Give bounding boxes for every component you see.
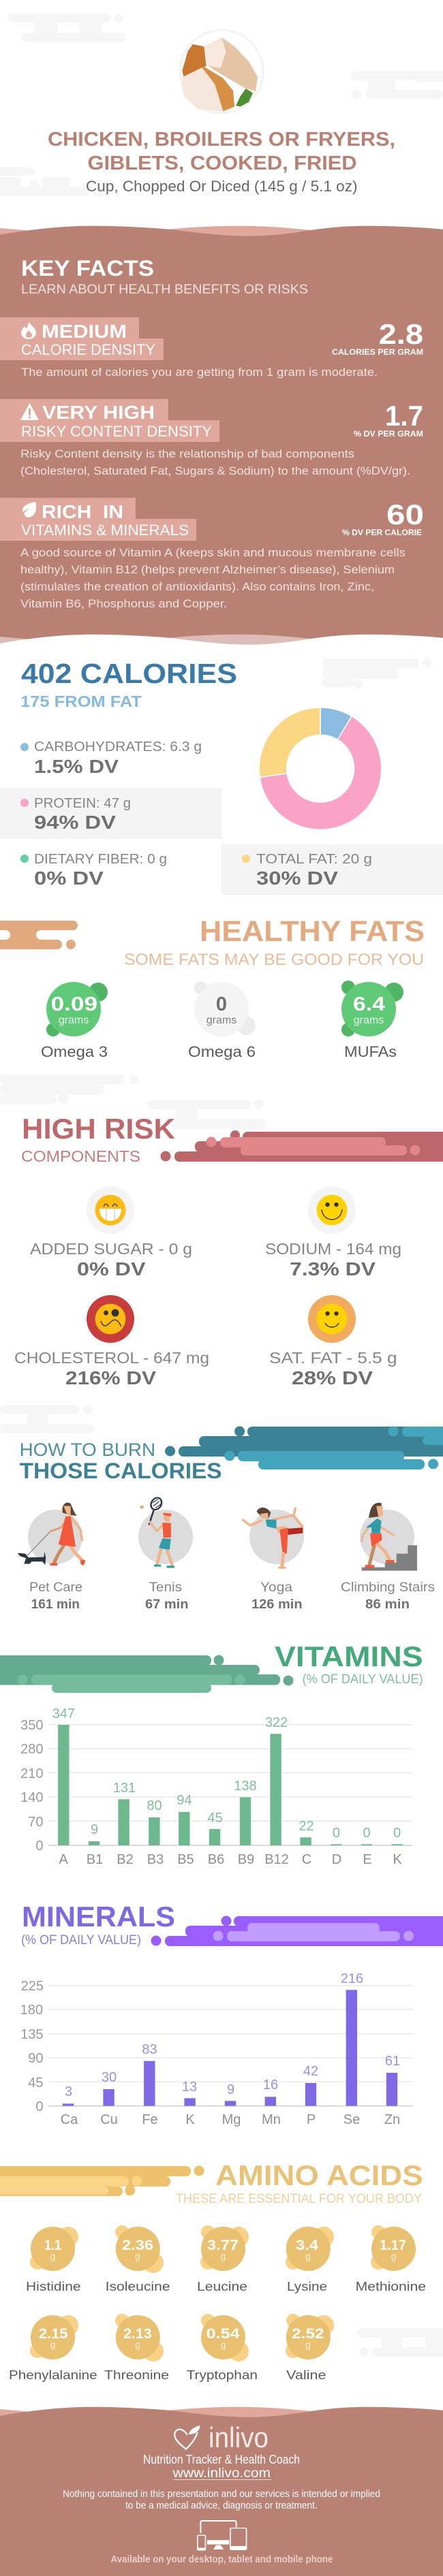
subheading: percent of daily value: (% OF DAILY VALUE)	[21, 1933, 141, 1947]
fact: rich in vitamins and minerals	[0, 498, 424, 610]
activity labels	[29, 1580, 435, 1612]
activity: pet care	[18, 1503, 86, 1565]
amino: tryptophan: Tryptophan	[187, 2368, 258, 2382]
bar chart: vitamins: B2	[117, 1852, 134, 1867]
bar chart: minerals	[20, 1971, 412, 2127]
stat: 1.7: 1.7	[385, 400, 423, 432]
amino: isoleucine: Isoleucine	[106, 2280, 170, 2293]
amino: leucine	[197, 2225, 249, 2293]
amino: threonine	[104, 2314, 169, 2382]
legend: dietary fiber: DIETARY FIBER: 0 g	[34, 852, 167, 867]
bar chart: vitamins: 9	[91, 1822, 98, 1837]
heading: healthy fats: HEALTHY FATS	[200, 915, 425, 948]
amino: isoleucine	[106, 2225, 170, 2293]
panel: how to burn those calories	[18, 1426, 443, 1612]
legend: total fat	[222, 844, 443, 895]
heading: high risk: HIGH RISK	[22, 1113, 175, 1145]
stat: omega 6: 0	[216, 993, 227, 1015]
activity labels: Yoga	[260, 1580, 292, 1595]
icon: leaf	[22, 502, 36, 518]
subtitle: serving size: Cup, Chopped Or Diced (145 g / 5.1 oz)	[86, 178, 357, 195]
bar chart: minerals: 216	[341, 1971, 363, 1986]
legend: protein: 94% DV	[34, 812, 116, 833]
decorative banner: burn	[165, 1426, 443, 1469]
bar chart: vitamins: B3	[147, 1852, 164, 1867]
bar chart: vitamins: 347	[52, 1706, 75, 1721]
bar chart: vitamins: B6	[208, 1852, 224, 1867]
bar chart: minerals: Se	[343, 2112, 360, 2127]
bar chart: minerals: 90	[28, 2051, 44, 2066]
icon: flame	[21, 322, 36, 339]
bar chart: vitamins: 0	[35, 1839, 44, 1854]
panel: calories	[0, 658, 443, 895]
amino: threonine: g	[135, 2339, 140, 2350]
legend: total fat: 30% DV	[256, 868, 338, 889]
bar chart: minerals: 13	[182, 2080, 197, 2095]
bar chart: vitamins: B5	[177, 1852, 194, 1867]
description: (Cholesterol, Saturated Fat, Sugars & Sodium) to the amount (%DV/gr).	[20, 464, 410, 477]
stat unit: % DV PER GRAM	[354, 429, 423, 439]
label: vitamins and minerals: VITAMINS & MINERALS	[21, 522, 189, 539]
bar chart: minerals: 45	[28, 2076, 44, 2090]
item: sodium: 7.3% DV	[290, 1258, 376, 1279]
bar chart: vitamins: C	[302, 1852, 311, 1867]
subheading: key facts: LEARN ABOUT HEALTH BENEFITS OR RISKS	[21, 283, 308, 297]
subheading: healthy fats: SOME FATS MAY BE GOOD FOR YOU	[124, 951, 424, 969]
amino: lysine: Lysine	[287, 2280, 327, 2293]
description: Risky Content density is the relationship of bad components	[20, 447, 354, 460]
logo: inlivo	[174, 2421, 269, 2453]
legend: carbohydrates: CARBOHYDRATES: 6.3 g	[34, 740, 202, 754]
disclaimer: Nothing contained in this presentation and our services is intended or implied	[63, 2489, 380, 2500]
bar chart: minerals: 225	[21, 1979, 44, 1994]
legend: protein	[0, 789, 222, 839]
bar chart: minerals: 83	[142, 2042, 157, 2057]
bar chart: minerals: Mn	[262, 2112, 281, 2127]
bar chart: vitamins: 140	[20, 1790, 44, 1805]
panel: amino acids	[0, 2159, 426, 2382]
stat: omega 6: grams	[207, 1015, 236, 1026]
heading: calories: 402 CALORIES	[21, 658, 237, 689]
bar chart: minerals: 61	[385, 2054, 400, 2069]
panel: healthy fats	[0, 915, 425, 1060]
website link: www.inlivo.com	[172, 2466, 271, 2481]
disclaimer	[63, 2489, 380, 2511]
subheading: percent of daily value: (% OF DAILY VALUE)	[303, 1672, 423, 1687]
stat: mufas: 6.4	[353, 993, 385, 1015]
description: healthy), Vitamin B12 (helps prevent Alzheimer’s disease), Selenium	[20, 563, 395, 576]
legend: protein: PROTEIN: 47 g	[34, 796, 131, 811]
legend: total fat: TOTAL FAT: 20 g	[256, 852, 372, 867]
decorative banner: vitamins	[0, 1655, 293, 1693]
title: CHICKEN, BROILERS OR FRYERS,	[48, 129, 395, 150]
activity labels: Pet Care	[29, 1580, 82, 1595]
amino: valine: 2.52	[292, 2326, 324, 2342]
amino: phenylalanine: Phenylalanine	[9, 2368, 97, 2382]
icon: devices	[198, 2521, 247, 2550]
description: The amount of calories you are getting from 1 gram is moderate.	[21, 366, 378, 379]
bar chart: minerals: Zn	[384, 2112, 400, 2127]
bar chart: minerals: Mg	[222, 2112, 241, 2127]
bar chart: vitamins: 0	[393, 1826, 401, 1841]
stat: 2.8: 2.8	[379, 318, 423, 350]
item: saturated fat: 28% DV	[292, 1367, 373, 1388]
amino: methionine	[356, 2225, 426, 2293]
bar chart: vitamins: 70	[28, 1815, 44, 1830]
stat: mufas: MUFAs	[344, 1043, 397, 1060]
stat unit: % DV PER CALORIE	[342, 528, 422, 537]
bar chart: vitamins: 280	[20, 1742, 44, 1757]
bar chart: minerals: 3	[65, 2084, 72, 2099]
bar chart: minerals: 16	[263, 2078, 278, 2093]
amino: lysine	[286, 2227, 334, 2293]
description	[20, 546, 406, 610]
bar chart: vitamins: 131	[113, 1781, 136, 1796]
item: cholesterol	[14, 1295, 209, 1388]
donut chart: macronutrients	[259, 707, 382, 829]
bar chart: vitamins: 0	[363, 1826, 371, 1841]
bar chart: minerals: K	[185, 2112, 195, 2127]
subheading: amino acids: THESE ARE ESSENTIAL FOR YOUR BODY	[176, 2192, 422, 2206]
bar chart: minerals: 0	[35, 2099, 44, 2114]
bar chart: minerals: Ca	[61, 2112, 78, 2127]
label: rich in: RICH IN	[42, 501, 123, 522]
bar chart: vitamins: 138	[234, 1779, 257, 1794]
amino: tryptophan	[187, 2314, 258, 2382]
description: A good source of Vitamin A (keeps skin and mucous membrane cells	[20, 546, 406, 559]
heading: key facts: KEY FACTS	[21, 256, 154, 281]
bar chart: vitamins: D	[332, 1852, 341, 1867]
bar chart: minerals: Fe	[142, 2112, 158, 2127]
icon: warning triangle	[20, 403, 39, 420]
amino: phenylalanine	[9, 2315, 97, 2382]
amino: methionine: Methionine	[356, 2280, 426, 2293]
stat unit: CALORIES PER GRAM	[332, 347, 423, 357]
item: saturated fat: SAT. FAT - 5.5 g	[269, 1349, 397, 1367]
heading: vitamins: VITAMINS	[275, 1640, 423, 1672]
bar chart: vitamins: 22	[299, 1819, 314, 1834]
subheading: components: COMPONENTS	[21, 1147, 140, 1165]
amino: lysine: 3.4	[296, 2238, 318, 2253]
item: added sugar: ADDED SUGAR - 0 g	[30, 1240, 192, 1258]
activity: climbing stairs	[360, 1503, 417, 1571]
bar chart: vitamins: E	[363, 1852, 372, 1867]
item: cholesterol: 216% DV	[65, 1367, 156, 1388]
label: calorie density: CALORIE DENSITY	[21, 341, 155, 358]
decorative banner: minerals	[151, 1916, 443, 1946]
decorative banner: high risk	[161, 1130, 443, 1162]
legend: dietary fiber	[20, 852, 167, 889]
decorative banner: healthy fats	[0, 921, 78, 949]
bar chart: minerals: 30	[102, 2070, 117, 2085]
bar chart: minerals: 135	[20, 2027, 44, 2042]
stat: mufas	[341, 981, 403, 1060]
stat: omega 3	[41, 982, 108, 1060]
bar chart: vitamins: B12	[264, 1852, 289, 1867]
panel: vitamins	[0, 1640, 423, 1867]
bar chart: vitamins: 80	[147, 1798, 162, 1813]
subheading: from fat: 175 FROM FAT	[20, 693, 142, 710]
amino: isoleucine: g	[135, 2251, 140, 2261]
bar chart: vitamins: A	[59, 1852, 68, 1867]
stat: mufas: grams	[354, 1015, 384, 1026]
bar chart: vitamins: 350	[20, 1718, 44, 1733]
heading: those calories: THOSE CALORIES	[20, 1459, 222, 1483]
fact: risky content density	[0, 399, 423, 477]
bar chart: vitamins: 0	[333, 1826, 340, 1841]
stat: omega 6	[188, 981, 256, 1060]
heading: amino acids: AMINO ACIDS	[215, 2159, 423, 2191]
bar chart: minerals: 42	[303, 2064, 318, 2079]
bar chart: vitamins: 210	[20, 1766, 44, 1781]
fact: calorie density	[0, 317, 423, 379]
description: Vitamin B6, Phosphorus and Copper.	[20, 597, 227, 610]
activity labels: 161 min	[31, 1597, 80, 1612]
amino: valine: g	[305, 2339, 311, 2350]
label: very high: VERY HIGH	[42, 402, 155, 423]
bar chart: minerals: P	[307, 2112, 316, 2127]
bar chart: minerals: 180	[20, 2003, 43, 2018]
item: cholesterol: CHOLESTEROL - 647 mg	[14, 1349, 209, 1367]
amino: threonine: Threonine	[104, 2368, 169, 2382]
amino: valine: Valine	[286, 2368, 326, 2382]
amino: valine	[286, 2314, 334, 2382]
disclaimer: to be a medical advice, diagnosis or treatment.	[125, 2500, 318, 2511]
bar chart: vitamins: 322	[265, 1715, 288, 1730]
legend: carbohydrates: 1.5% DV	[34, 756, 119, 777]
amino: phenylalanine: g	[50, 2339, 55, 2350]
label: risky content density: RISKY CONTENT DENSITY	[21, 423, 212, 440]
heading: how to burn: HOW TO BURN	[20, 1440, 155, 1460]
amino: histidine: Histidine	[26, 2280, 81, 2293]
item: saturated fat	[269, 1295, 397, 1388]
stat: omega 3: 0.09	[51, 993, 97, 1015]
amino: histidine: g	[50, 2251, 55, 2261]
item: added sugar	[30, 1186, 192, 1279]
bar chart: vitamins: B9	[238, 1852, 254, 1867]
stat: 60: 60	[386, 498, 424, 530]
item: sodium: SODIUM - 164 mg	[265, 1240, 401, 1258]
amino: tryptophan: g	[221, 2339, 226, 2350]
activity labels: Climbing Stairs	[341, 1580, 435, 1595]
title	[48, 129, 395, 174]
panel: footer	[0, 2407, 443, 2576]
legend: carbohydrates	[20, 740, 202, 777]
activity: yoga	[243, 1508, 304, 1569]
amino: leucine: 3.77	[207, 2238, 239, 2253]
bar chart: vitamins	[20, 1706, 412, 1867]
amino: histidine: 1.1	[44, 2238, 61, 2253]
panel: high risk components	[14, 1113, 443, 1388]
activity labels: 126 min	[251, 1597, 303, 1612]
panel: key facts	[0, 226, 443, 654]
bar chart: minerals: 9	[227, 2082, 234, 2097]
legend: dietary fiber: 0% DV	[34, 868, 104, 889]
bar chart: vitamins: K	[393, 1852, 402, 1867]
amino: lysine: g	[305, 2251, 311, 2261]
activity labels: Tenis	[149, 1580, 182, 1595]
amino: isoleucine: 2.36	[122, 2238, 153, 2253]
label: medium: MEDIUM	[42, 321, 127, 342]
heading: minerals: MINERALS	[22, 1901, 175, 1933]
amino: leucine: Leucine	[197, 2280, 247, 2293]
activity labels: 67 min	[145, 1597, 188, 1612]
description: (stimulates the creation of antioxidants). Also contains Iron, Zinc,	[20, 580, 374, 593]
availability note: Available on your desktop, tablet and mobile phone	[110, 2554, 333, 2565]
description	[20, 447, 410, 477]
stat: omega 6: Omega 6	[188, 1043, 256, 1060]
amino: methionine: 1.17	[380, 2238, 406, 2253]
amino: phenylalanine: 2.15	[39, 2326, 68, 2342]
amino: methionine: g	[391, 2251, 396, 2261]
item: added sugar: 0% DV	[77, 1258, 146, 1279]
decorative banner: amino acids	[0, 2165, 204, 2196]
activity labels: 86 min	[365, 1597, 410, 1612]
item: sodium	[265, 1186, 401, 1279]
logo: inlivo: inlivo	[209, 2421, 269, 2453]
bar chart: vitamins: 94	[177, 1793, 192, 1808]
activity: tennis	[138, 1497, 193, 1568]
stat: omega 3: Omega 3	[41, 1043, 108, 1060]
amino: leucine: g	[221, 2251, 226, 2261]
bar chart: vitamins: 45	[207, 1811, 223, 1826]
title: GIBLETS, COOKED, FRIED	[87, 153, 357, 174]
stat: omega 3: grams	[59, 1015, 89, 1026]
tagline: Nutrition Tracker & Health Coach	[143, 2453, 300, 2466]
icon: chicken photo	[180, 30, 263, 113]
amino: threonine: 2.13	[123, 2326, 152, 2342]
bar chart: minerals: Cu	[100, 2112, 118, 2127]
bar chart: vitamins: B1	[87, 1852, 103, 1867]
panel: minerals	[20, 1901, 443, 2127]
amino: histidine	[26, 2227, 81, 2293]
amino: tryptophan: 0.54	[207, 2326, 240, 2342]
